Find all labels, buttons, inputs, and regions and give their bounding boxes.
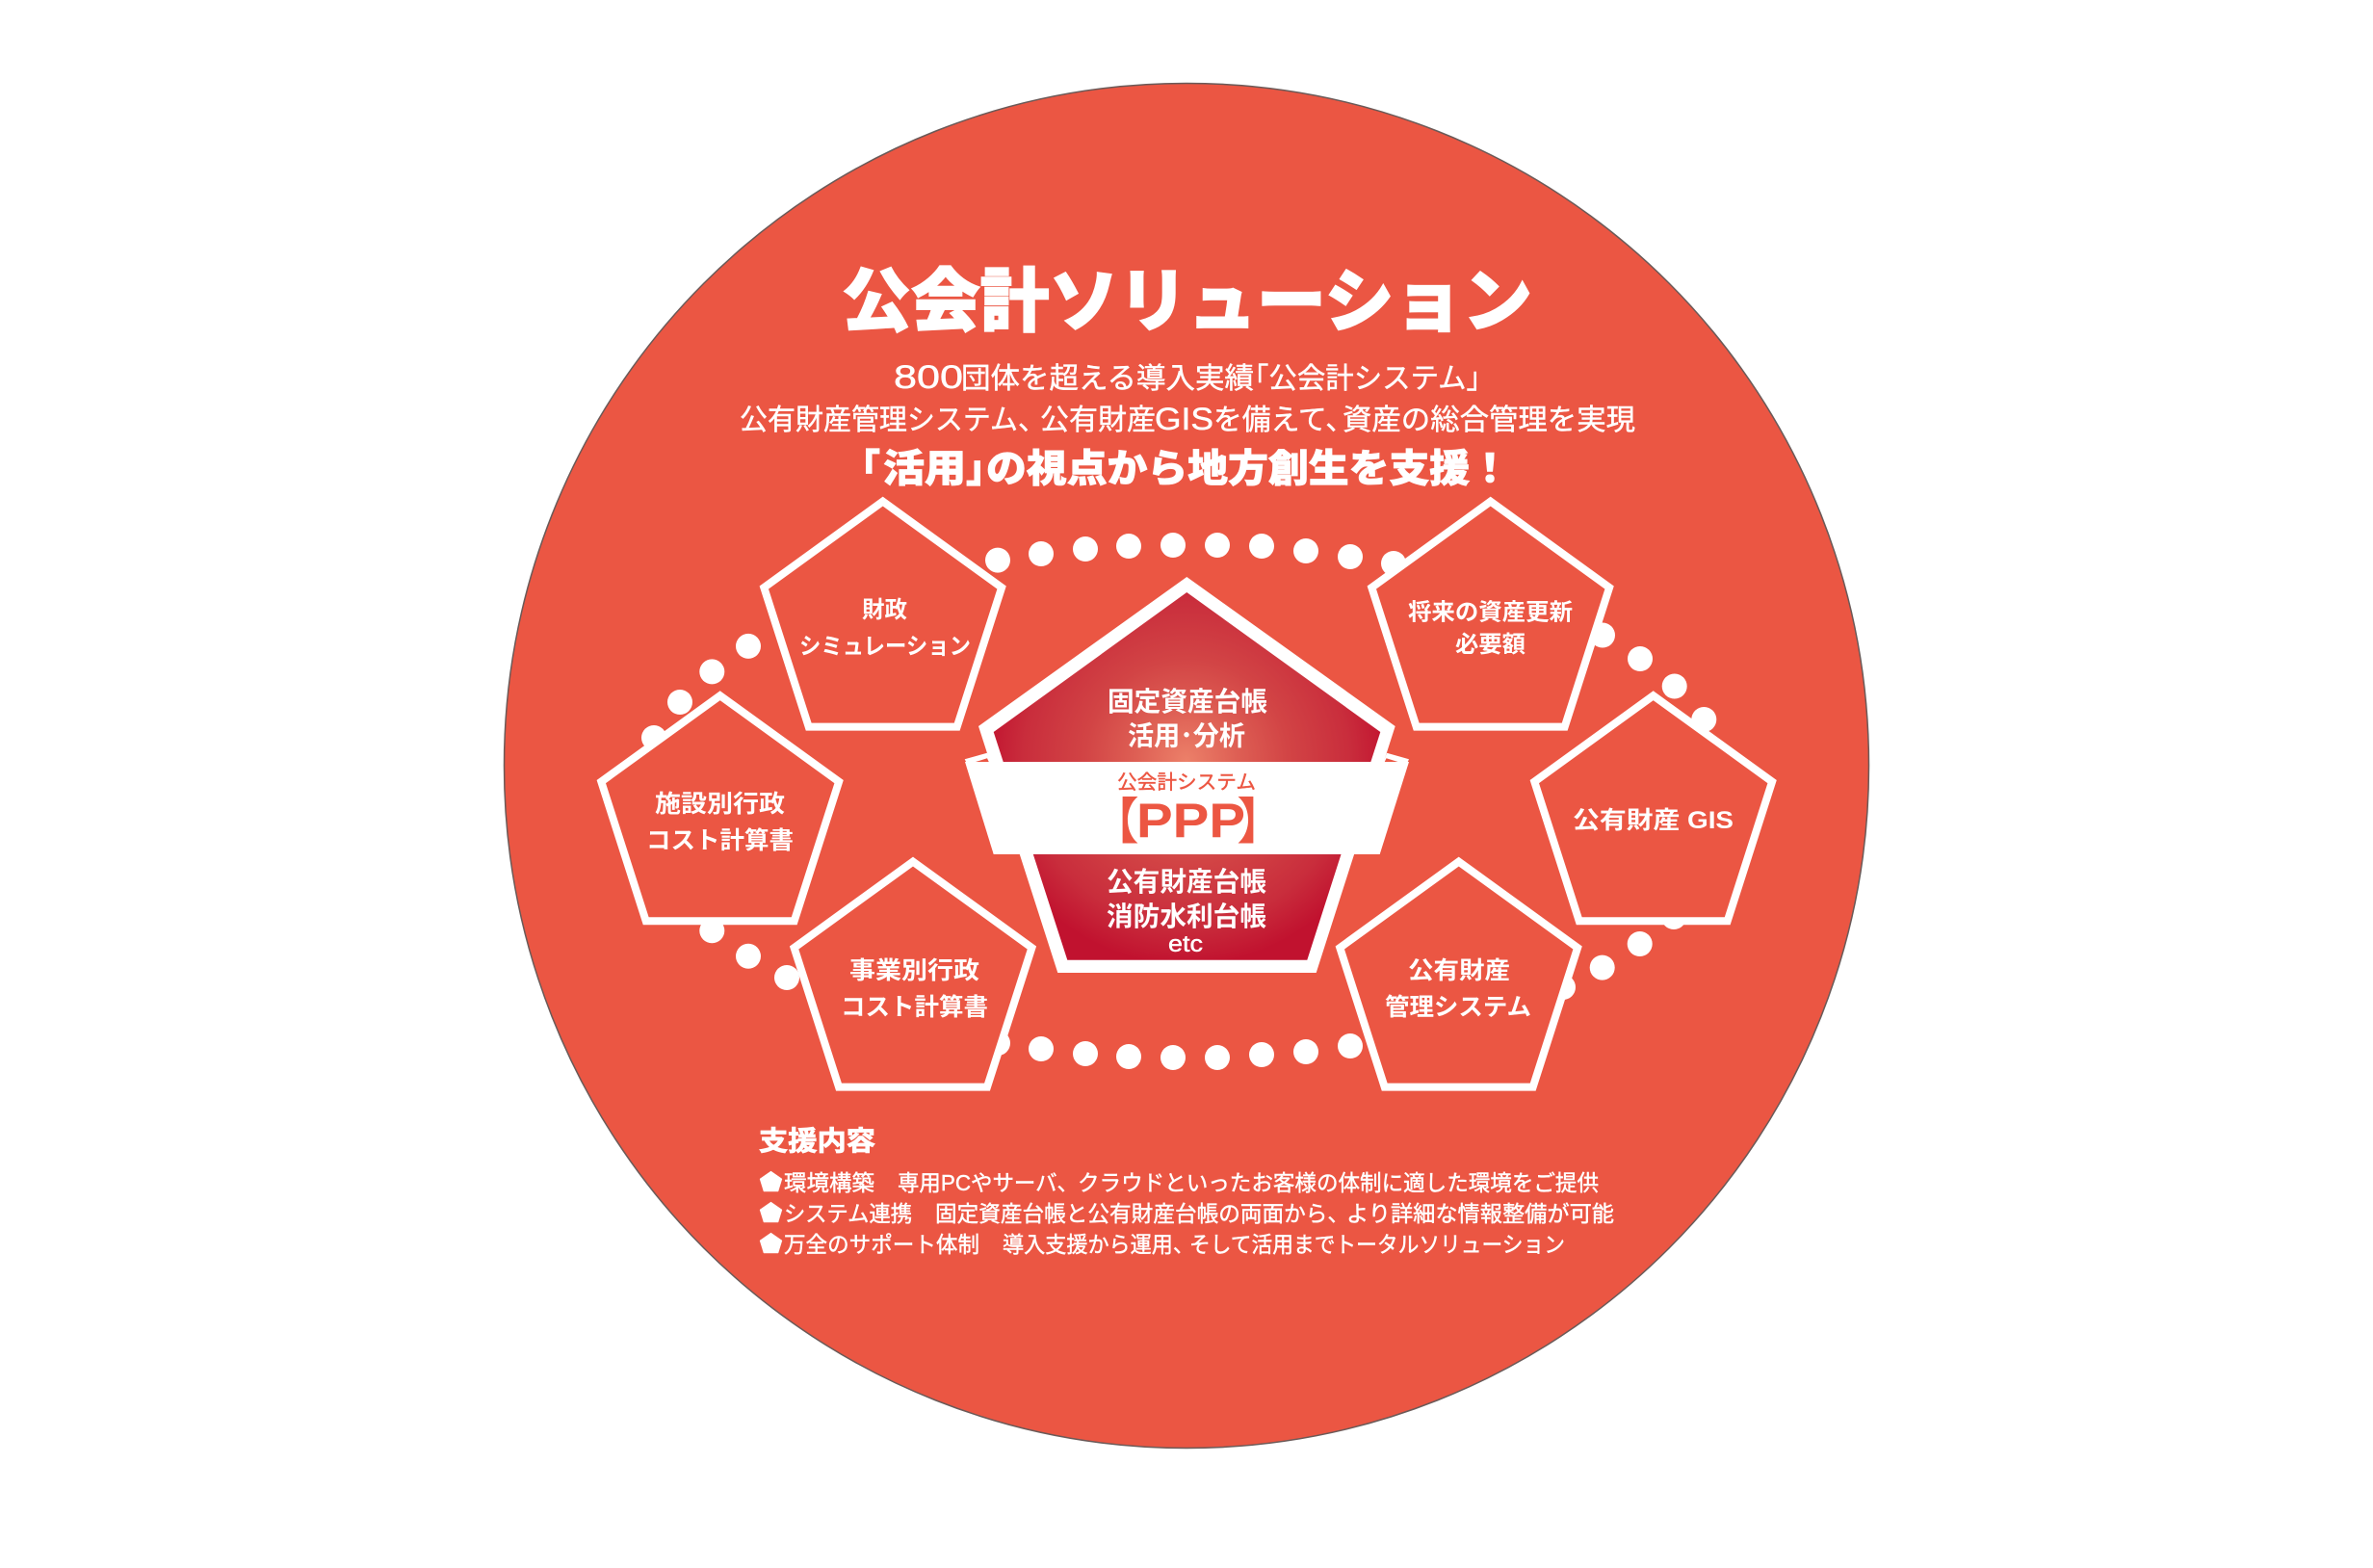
intro line 1: [894, 359, 1495, 396]
bullet item 2: 固定資産台帳と公有財産台帳の両面から、: [935, 1201, 1349, 1226]
support list: [760, 1170, 1614, 1257]
intro line 2: 資産の総合管理を実現: [1343, 405, 1635, 436]
bullet item 3: そして活用までトータルソリューション: [1189, 1232, 1565, 1257]
bullet item 1: [760, 1170, 1599, 1195]
panel: 公有財産管理システム: [1340, 862, 1578, 1087]
text: etc: etc: [1168, 931, 1203, 957]
background circle: [505, 83, 1868, 1449]
panel: central PPP pentagon: [965, 577, 1409, 973]
intro line 2: [740, 402, 1635, 436]
panel: 将来の資産更新必要額: [1371, 502, 1609, 727]
title: 公会計ソリューション: [842, 264, 1532, 341]
panel: 施設別行政コスト計算書: [601, 695, 839, 921]
text: PPP: [1089, 794, 1287, 850]
bullet item 1: クラウドといったお客様の体制に適した環境をご提供: [1078, 1170, 1599, 1195]
panel: 公有財産管理システム: 公有財産: [1408, 957, 1510, 984]
panel: 施設別行政コスト計算書: コスト計算書: [646, 827, 794, 854]
tagline: の視点から地方創生を支援！: [986, 448, 1510, 490]
connector dots: [641, 533, 1716, 1070]
support heading: 支援内容: [759, 1126, 875, 1156]
bullet item 3: [760, 1232, 1565, 1257]
text: 固定資産台帳: 固定資産台帳: [1108, 687, 1267, 717]
text: PPP: 【: [1089, 795, 1139, 850]
bullet item 2: システム連携: [784, 1201, 912, 1226]
panel: 事業別行政コスト計算書: 事業別行政: [849, 957, 979, 984]
panel: 事業別行政コスト計算書: [795, 862, 1031, 1087]
panel: 事業別行政コスト計算書: コスト計算書: [841, 994, 988, 1021]
tagline: 活用: [883, 448, 966, 490]
text: 消防水利台帳: 消防水利台帳: [1107, 902, 1266, 931]
intro line 1: 「公会計システム」: [1240, 363, 1495, 395]
panel: 財政シミュレーション: [764, 502, 1002, 727]
intro line 2: GIS: [1155, 402, 1213, 436]
bullet item 1: 環境構築: [784, 1170, 874, 1195]
white band: [965, 762, 1409, 854]
text: 活用・分析: 活用･分析: [1128, 720, 1245, 751]
intro line 2: 公有財産: [1040, 405, 1156, 436]
text: 公会計システム: 公会計システム: [1117, 771, 1256, 794]
panel: 公有財産 GIS: 公有財産 GIS: [1573, 807, 1734, 834]
panel: 将来の資産更新必要額: 将来の資産更新: [1408, 599, 1573, 626]
bullet item 2: より詳細な情報整備が可能: [1346, 1201, 1614, 1226]
panel: 将来の資産更新必要額: 必要額: [1455, 632, 1526, 658]
bullet item 1: 専用PCやサーバ、: [898, 1170, 1079, 1195]
intro line 2: を備えて、: [1213, 405, 1354, 436]
tagline: 「: [842, 448, 880, 490]
intro line 1: 800: [894, 359, 963, 396]
text: PPP: 】: [1237, 795, 1287, 850]
band tips: [965, 753, 1409, 766]
panel: 財政シミュレーション: シミュレーション: [799, 634, 971, 660]
bullet item 2: [760, 1201, 1614, 1226]
intro line 2: 公有財産管理システム、: [740, 405, 1046, 436]
panel: 施設別行政コスト計算書: 施設別行政: [655, 791, 785, 818]
intro line 1: 団体を超える導入実績: [961, 363, 1254, 395]
panel: 財政シミュレーション: 財政: [862, 597, 907, 623]
panel: 公有財産 GIS: [1534, 695, 1772, 921]
tagline: 」: [966, 448, 1004, 490]
bullet item 3: 万全のサポート体制: [784, 1232, 979, 1257]
panel: 公有財産管理システム: 管理システム: [1385, 994, 1531, 1021]
text: PPP: PPP: [1136, 794, 1245, 848]
text: 公有財産台帳: 公有財産台帳: [1107, 867, 1266, 897]
bullet item 3: 導入支援から運用、: [1003, 1232, 1194, 1257]
